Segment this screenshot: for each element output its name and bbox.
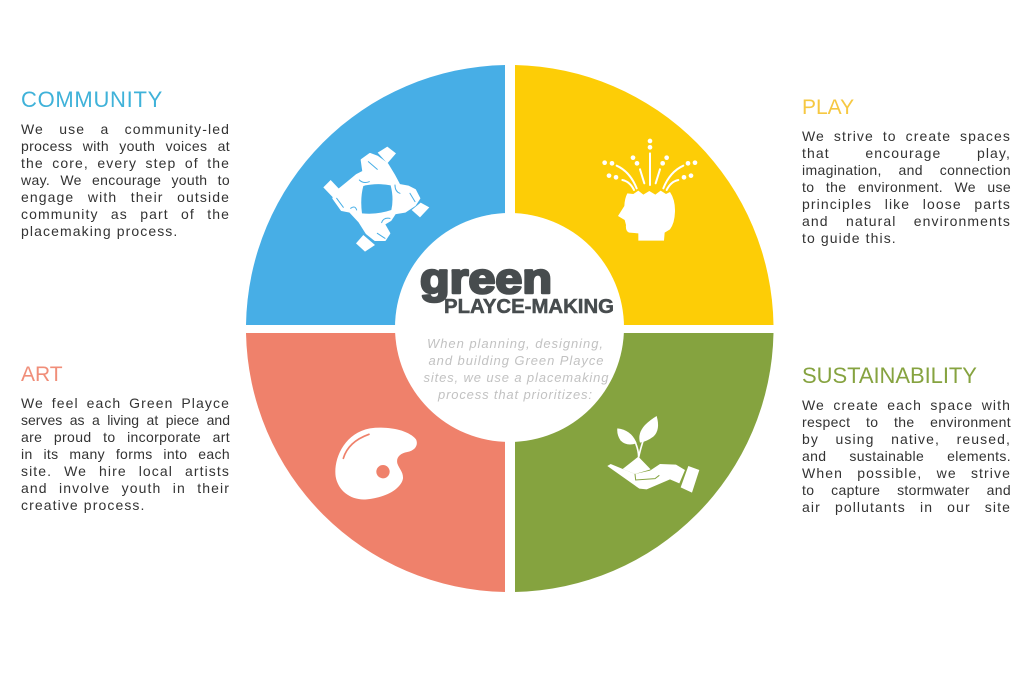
text: community — [21, 121, 230, 239]
logo: green: green — [420, 255, 552, 303]
text: art: serves as a living at piece and — [21, 412, 230, 428]
text: art: are proud to incorporate art — [21, 429, 230, 445]
panel: play quadrant — [515, 65, 774, 325]
text: community: We use a community-led — [21, 121, 230, 137]
centre circle — [395, 213, 624, 442]
text: art: creative process. — [21, 497, 146, 513]
text: art — [21, 395, 230, 513]
text: art: site. We hire local artists — [21, 463, 230, 479]
icon: palette — [335, 428, 417, 499]
text: sustainability: When possible, we strive — [802, 465, 1011, 481]
intro text: When planning, designing, — [427, 336, 603, 351]
text: art: in its many forms into each — [21, 446, 230, 462]
text: sustainability: air pollutants in our site — [802, 499, 1011, 515]
text: play: that encourage play, — [802, 145, 1011, 161]
text: play: and natural environments — [802, 213, 1011, 229]
heading: play: PLAY — [802, 96, 854, 119]
text: sustainability: and sustainable elements. — [802, 448, 1011, 464]
text: art: and involve youth in their — [21, 480, 230, 496]
icon: hand holding seedling — [607, 416, 699, 493]
text: sustainability: We create each space with — [802, 397, 1011, 413]
text: play: to guide this. — [802, 230, 897, 246]
text: community: the core, every step of the — [21, 155, 230, 171]
text: play: principles like loose parts — [802, 196, 1011, 212]
intro text: and building Green Playce — [428, 353, 604, 368]
text: sustainability: respect to the environment — [802, 414, 1011, 430]
text: sustainability — [802, 397, 1011, 515]
heading: community: COMMUNITY — [21, 87, 163, 112]
panel: art quadrant — [246, 333, 505, 592]
intro text: sites, we use a placemaking — [424, 370, 609, 385]
text: community: community as part of the — [21, 206, 230, 222]
text: sustainability: by using native, reused, — [802, 431, 1011, 447]
text: community: placemaking process. — [21, 223, 178, 239]
text: play — [802, 128, 1011, 246]
intro text: process that prioritizes: — [437, 387, 592, 402]
text: art: We feel each Green Playce — [21, 395, 230, 411]
text: play: imagination, and connection — [802, 162, 1011, 178]
logo: playce-making: PLAYCE-MAKING — [444, 296, 614, 318]
panel: sustainability quadrant — [515, 333, 774, 592]
text: community: engage with their outside — [21, 189, 230, 205]
text: community: process with youth voices at — [21, 138, 230, 154]
text: play: to the environment. We use — [802, 179, 1011, 195]
panel: community quadrant — [246, 65, 505, 325]
heading: sustainability: SUSTAINABILITY — [802, 363, 977, 388]
text: play: We strive to create spaces — [802, 128, 1011, 144]
text: sustainability: to capture stormwater and — [802, 482, 1011, 498]
text: community: way. We encourage youth to — [21, 172, 230, 188]
icon: head with radiating ideas — [602, 139, 697, 241]
icon: four joined hands — [323, 147, 429, 252]
intro text — [424, 336, 609, 402]
heading: art: ART — [21, 363, 63, 386]
